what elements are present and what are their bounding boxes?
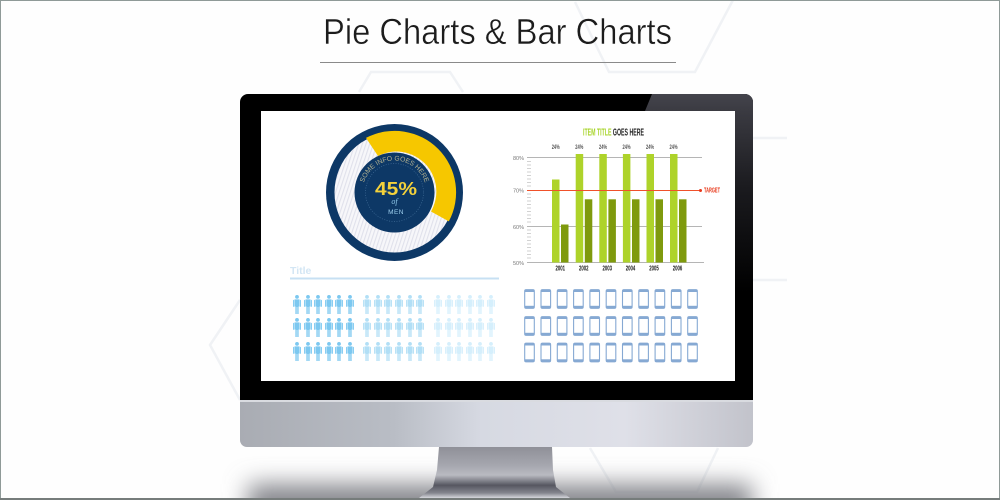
bar value labels: 24% — [670, 144, 678, 151]
silver chin — [240, 400, 753, 447]
monitor stand — [419, 447, 570, 498]
axis ticks — [527, 162, 531, 258]
section rule — [290, 278, 499, 280]
people pictogram section — [290, 265, 499, 361]
title underline — [320, 62, 676, 63]
year labels: 2004 — [626, 264, 636, 273]
striped remainder — [334, 132, 454, 252]
bezel glare — [645, 94, 753, 400]
section title: Title — [290, 265, 312, 277]
black bezel — [240, 94, 753, 400]
bar value labels: 24% — [599, 144, 607, 151]
dotted inner ring — [366, 164, 424, 222]
men label: MEN — [388, 209, 404, 216]
curved label: SOME INFO GOES HERE — [360, 156, 430, 182]
people group dark — [293, 295, 354, 361]
grid lines — [527, 157, 704, 263]
chart title: ITEM TITLE GOES HERE — [583, 127, 644, 139]
faint hexagon background pattern — [210, 0, 787, 492]
people group light — [434, 295, 495, 361]
axis labels: 60% — [513, 225, 524, 231]
year labels: 2002 — [579, 264, 588, 273]
outer ring — [326, 124, 463, 261]
monitor — [240, 94, 753, 498]
bar value labels: 24% — [622, 144, 631, 151]
monitor shadow — [248, 484, 752, 500]
chin highlight — [240, 400, 753, 402]
bar value labels — [552, 144, 678, 151]
bar value labels: 24% — [552, 144, 560, 151]
year labels: 2003 — [602, 264, 612, 273]
axis labels: 70% — [513, 188, 524, 194]
year labels — [556, 264, 682, 273]
year labels: 2001 — [556, 264, 565, 273]
phone pictogram grid — [525, 290, 697, 362]
target line — [527, 185, 720, 194]
year labels: 2005 — [649, 264, 659, 273]
donut chart — [326, 124, 463, 261]
target line: TARGET — [704, 185, 720, 194]
axis labels — [513, 156, 524, 267]
light bars — [552, 154, 678, 262]
title: Pie Charts & Bar Charts — [323, 11, 672, 52]
screen — [261, 111, 735, 381]
dark bars — [561, 199, 686, 262]
of label: of — [391, 197, 399, 206]
year labels: 2006 — [673, 264, 682, 273]
axis labels: 80% — [513, 156, 524, 162]
axis labels: 50% — [513, 261, 524, 267]
people group medium — [363, 295, 424, 361]
bar value labels: 24% — [646, 144, 654, 151]
percent value: 45% — [375, 179, 417, 199]
bar value labels: 24% — [575, 144, 583, 151]
inner disc — [354, 152, 434, 232]
gold 45 percent arc — [366, 131, 456, 221]
bar chart — [513, 127, 720, 273]
